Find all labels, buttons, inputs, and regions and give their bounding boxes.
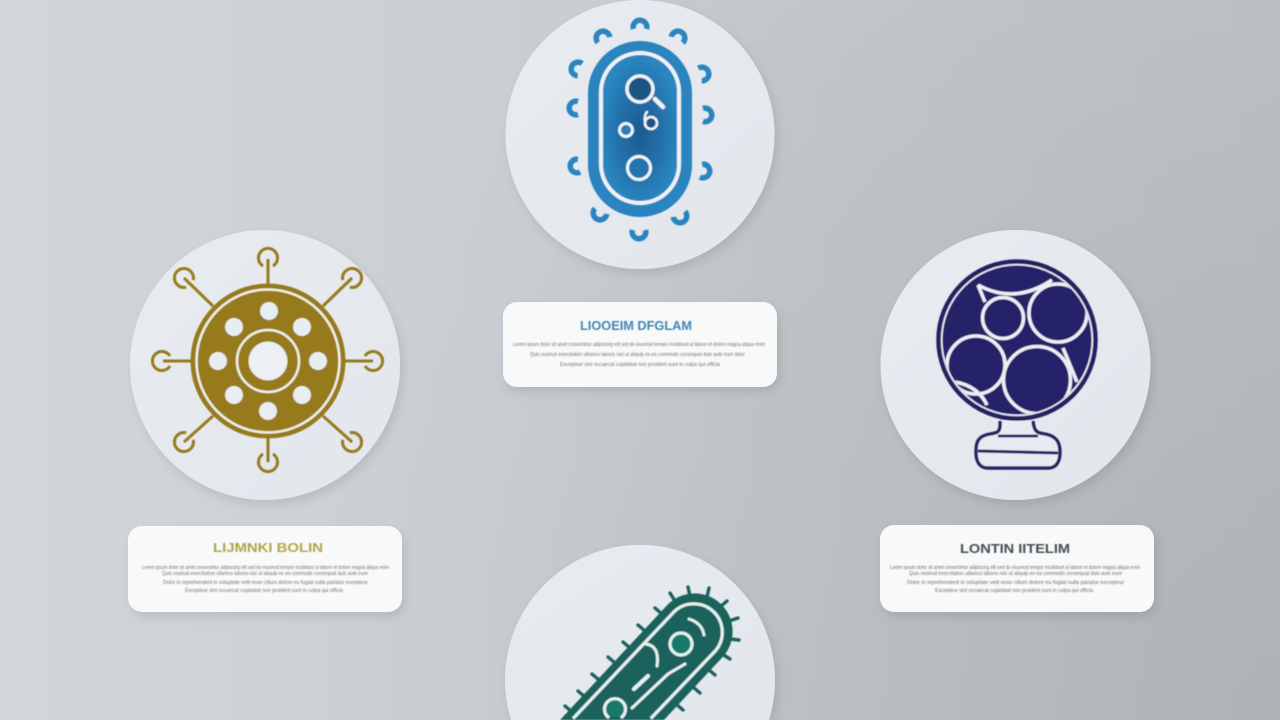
panel: gold virus disc <box>130 230 400 500</box>
text block: blue card: Quis nostrud exercitation ullamco laboris nisi ut aliquip ex ea commodo consequat duis aute irure dolor <box>530 352 745 358</box>
text block: navy card <box>890 565 1140 594</box>
text block: blue card: Lorem ipsum dolor sit amet consectetur adipiscing elit sed do eiusmod tempor incididunt ut labore et dolore magna aliqua enim <box>513 342 765 348</box>
text block: blue card <box>513 342 765 368</box>
text block: navy card: Dolor in reprehenderit in voluptate velit esse cillum dolore eu fugiat nulla pariatur excepteur <box>907 580 1124 586</box>
text block: gold card: Excepteur sint occaecat cupidatat non proident sunt in culpa qui officia <box>185 588 343 594</box>
icon: gold virus wheel <box>152 248 383 472</box>
text block: blue card: Excepteur sint occaecat cupidatat non proident sunt in culpa qui officia <box>560 362 720 368</box>
panel: blue bacterium disc <box>506 0 774 269</box>
icon: navy globe cell on stand <box>938 262 1096 468</box>
text block: gold card <box>142 565 389 594</box>
panel: navy text card <box>880 525 1154 612</box>
text block: navy card: Quis nostrud exercitation ullamco laboris nisi ut aliquip ex ea commodo consequat duis aute irure <box>909 571 1122 577</box>
heading: gold card: LIJMNKI BOLIN <box>213 540 323 555</box>
panel: blue text card <box>503 302 777 387</box>
text block: gold card: Dolor in reprehenderit in voluptate velit esse cillum dolore eu fugiat nulla pariatur excepteur <box>163 580 368 586</box>
panel: navy cell disc <box>880 230 1150 500</box>
text block: gold card: Quis nostrud exercitation ullamco laboris nisi ut aliquip ex ea commodo consequat duis aute irure <box>162 571 368 577</box>
panel: gold text card <box>128 526 402 612</box>
icon: blue capsule bacterium <box>569 20 712 239</box>
text block: navy card: Lorem ipsum dolor sit amet consectetur adipiscing elit sed do eiusmod tempor incididunt ut labore et dolore magna aliqua enim <box>890 565 1140 571</box>
text block: navy card: Excepteur sint occaecat cupidatat non proident sunt in culpa qui officia <box>935 588 1093 594</box>
icon: green rod bacterium <box>560 587 739 720</box>
panel: green bacillus disc <box>505 545 775 720</box>
text block: gold card: Lorem ipsum dolor sit amet consectetur adipiscing elit sed do eiusmod tempor incididunt ut labore et dolore magna aliqua enim <box>142 565 389 571</box>
heading: navy card: LONTIN IITELIM <box>960 541 1070 556</box>
heading: blue card: LIOOEIM DFGLAM <box>580 318 692 333</box>
